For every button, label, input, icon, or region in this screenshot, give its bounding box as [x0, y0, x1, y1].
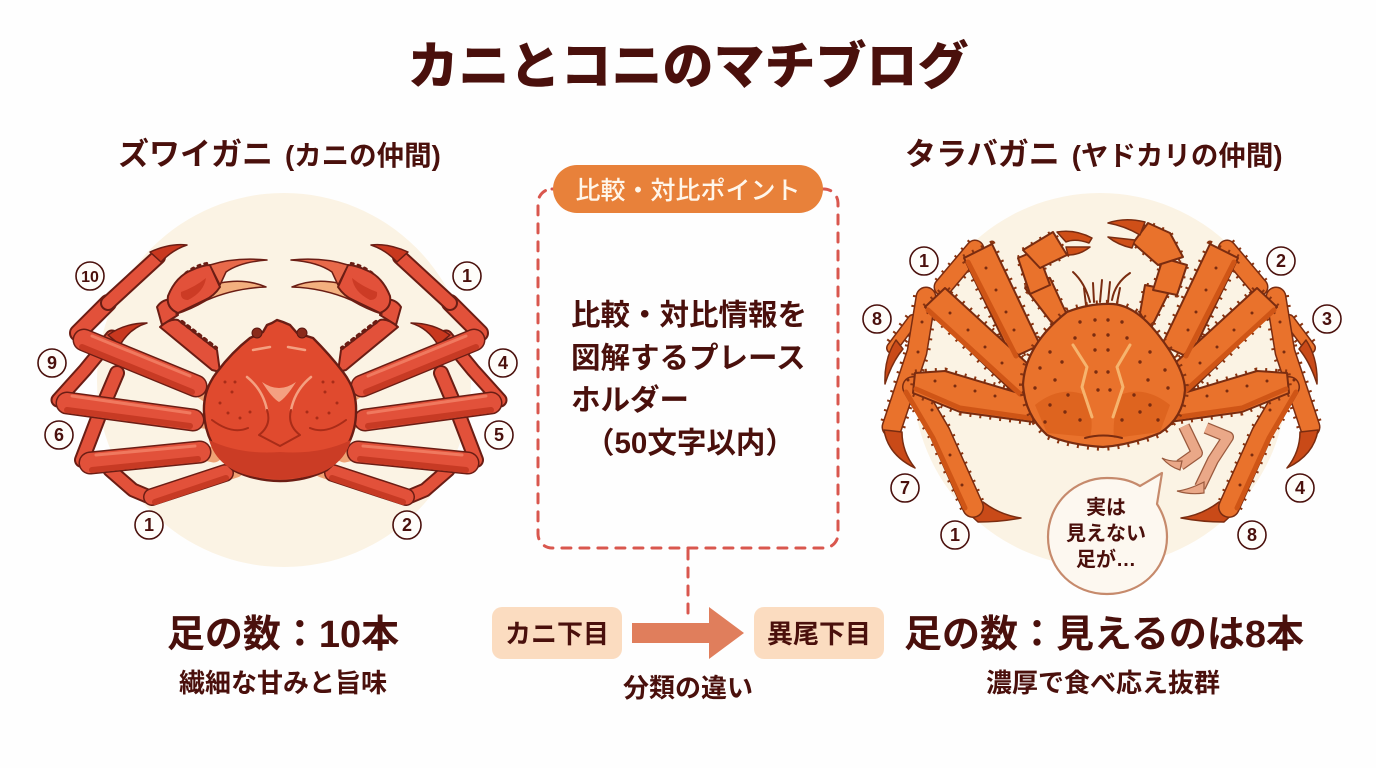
heading: snow crab: ズワイガニ (カニの仲間) [118, 137, 441, 172]
leg numbers: king crab [863, 247, 1341, 549]
icon: king crab [884, 220, 1318, 522]
speech bubble: hidden leg: 実は [1086, 496, 1126, 519]
leg numbers: snow crab: 10 [81, 269, 99, 286]
stat: snow crab legs: 足の数：10本 [167, 614, 399, 656]
left claw [1018, 231, 1092, 327]
leg numbers: snow crab [38, 262, 517, 539]
dashed frame [538, 189, 838, 548]
leg numbers: king crab: 4 [1295, 478, 1305, 498]
caption: classification difference: 分類の違い [623, 673, 753, 703]
placeholder text: （50文字以内） [585, 427, 795, 460]
leg numbers: snow crab: 6 [54, 425, 64, 445]
leg numbers: king crab: 3 [1322, 309, 1332, 329]
speech bubble: hidden leg [1048, 473, 1167, 594]
crab body [1023, 272, 1185, 447]
arrow [632, 607, 744, 659]
leg numbers: snow crab: 1 [462, 266, 472, 286]
leg numbers: snow crab: 2 [402, 515, 412, 535]
placeholder text: 比較・対比情報を [571, 299, 807, 332]
hidden legs [1162, 426, 1228, 494]
leg numbers: king crab: 1 [919, 251, 929, 271]
claw [157, 259, 267, 372]
leg numbers: king crab: 2 [1276, 251, 1286, 271]
box: anomura infraorder [754, 607, 884, 659]
box: anomura infraorder: 異尾下目 [767, 619, 871, 649]
background circle: king crab [913, 193, 1287, 567]
leg numbers: king crab: 1 [950, 525, 960, 545]
box: crab infraorder: カニ下目 [505, 619, 609, 649]
leg numbers: snow crab: 9 [47, 353, 57, 373]
stat: king crab legs: 足の数：見えるのは8本 [904, 614, 1304, 656]
icon: snow crab [58, 245, 500, 502]
speech bubble: hidden leg: 見えない [1066, 522, 1146, 545]
speech bubble: hidden leg: 足が… [1076, 547, 1136, 571]
leg numbers: king crab: 8 [1247, 525, 1257, 545]
placeholder text [571, 299, 807, 460]
connector: dashed line [686, 550, 690, 618]
leg numbers: king crab: 7 [900, 478, 910, 498]
leg numbers: snow crab: 4 [498, 353, 508, 373]
crab body [204, 320, 356, 481]
pill heading [553, 165, 823, 213]
panel: snow crab illustration [38, 193, 517, 567]
placeholder text: ホルダー [571, 383, 689, 417]
pill heading: 比較・対比ポイント [575, 177, 801, 205]
placeholder text: 図解するプレース [571, 342, 806, 375]
leg numbers: snow crab: 5 [494, 425, 504, 445]
description: king crab: 濃厚で食べ応え抜群 [986, 668, 1220, 698]
panel: king crab illustration [863, 193, 1341, 594]
leg numbers: king crab: 8 [872, 309, 882, 329]
heading: king crab: タラバガニ (ヤドカリの仲間) [905, 137, 1283, 172]
description: snow crab: 繊細な甘みと旨味 [179, 668, 387, 698]
right claw [1108, 220, 1187, 330]
background circle: snow crab [97, 193, 471, 567]
box: crab infraorder [492, 607, 622, 659]
title: カニとコニのマチブログ [407, 38, 969, 95]
panel: comparison points [538, 165, 838, 548]
leg numbers: snow crab: 1 [144, 515, 154, 535]
